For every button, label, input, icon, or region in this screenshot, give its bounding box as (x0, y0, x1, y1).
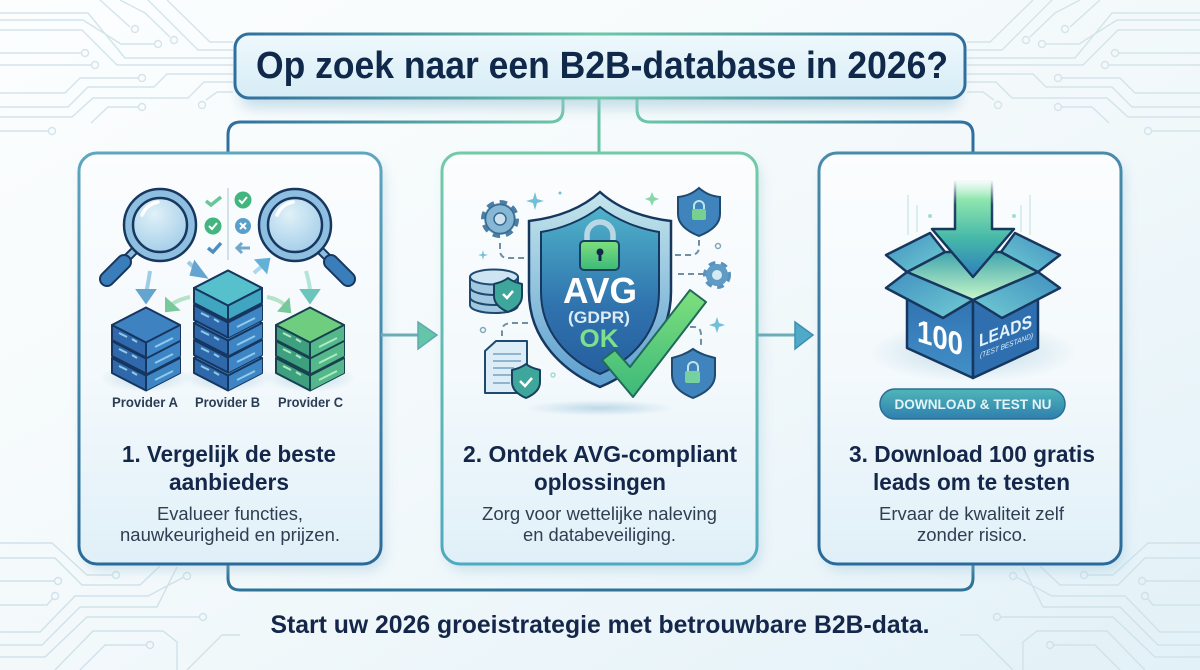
icon: main shield: AVG (563, 270, 637, 311)
stack: provider B (182, 270, 274, 392)
footer tagline: Start uw 2026 groeistrategie met betrouwbare B2B-data. (270, 611, 930, 639)
title box (235, 34, 965, 108)
dashed connector lines (500, 240, 704, 348)
connector lines between title and panels (228, 98, 973, 590)
icon: gear right (706, 264, 728, 286)
icon: main shield (529, 192, 671, 387)
text: step 2 description: en databeveiliging. (523, 525, 676, 545)
text: step 2 description (482, 504, 717, 545)
arrow: step 1 to step 2 (381, 322, 437, 349)
label on box: 100: 100 (917, 312, 963, 363)
button: download and test (880, 389, 1065, 419)
icon: big check mark (602, 290, 706, 397)
shadow under box (868, 322, 1078, 382)
provider labels: Provider B (195, 395, 260, 410)
icon: open box (886, 233, 1060, 378)
icon: left magnifying glass (107, 189, 196, 279)
icon: small shield with lock bottom right (672, 349, 715, 398)
shadow under shield (525, 400, 675, 416)
heading: step 1: 1. Vergelijk de beste (122, 441, 336, 467)
text: step 1 description: Evalueer functies, (157, 504, 303, 524)
text: step 3 description: Ervaar de kwaliteit zelf (879, 504, 1065, 524)
heading: step 2: oplossingen (534, 469, 666, 495)
stack: provider A (100, 308, 192, 392)
provider labels: Provider A (112, 395, 178, 410)
button: download and test: DOWNLOAD & TEST NU (894, 397, 1052, 412)
icon: database with shield (470, 270, 522, 313)
icon: right magnifying glass (259, 189, 348, 279)
heading: step 1: aanbieders (169, 469, 289, 495)
provider labels (112, 395, 343, 410)
icon: download arrow (932, 180, 1014, 277)
stack: provider C (264, 308, 356, 392)
icon: document with shield (485, 341, 540, 398)
icon: main shield: OK (580, 325, 618, 353)
provider labels: Provider C (278, 395, 343, 410)
panel 2: AVG compliance (442, 153, 761, 571)
text: step 3 description (879, 504, 1065, 545)
label on box: LEADS (979, 310, 1033, 360)
heading: step 2: 2. Ontdek AVG-compliant (463, 441, 737, 467)
icon: gear left (484, 203, 516, 235)
sparkles (478, 192, 725, 377)
flow arrows between providers (139, 260, 317, 311)
text: step 2 description: Zorg voor wettelijke naleving (482, 504, 717, 524)
heading: step 3: 3. Download 100 gratis (849, 441, 1095, 467)
panel 3: download leads (819, 153, 1125, 571)
label on box: LEADS: LEADS (979, 310, 1032, 351)
heading: step 3 (849, 441, 1095, 495)
comparison checkmarks (204, 188, 252, 260)
icon: main shield: (GDPR) (568, 308, 630, 327)
text: step 3 description: zonder risico. (917, 525, 1027, 545)
text: step 1 description (120, 504, 340, 545)
heading: step 2 (463, 441, 737, 495)
arrow: step 2 to step 3 (757, 322, 813, 349)
icon: small shield with lock top right (678, 188, 720, 236)
label on box: LEADS: (TEST BESTAND) (980, 331, 1033, 360)
heading: step 3: leads om te testen (873, 469, 1070, 495)
title box: Op zoek naar een B2B-database in 2026? (256, 45, 948, 87)
light beams and dots (908, 195, 1030, 235)
panel 1: compare providers (79, 153, 385, 571)
heading: step 1 (122, 441, 336, 495)
text: step 1 description: nauwkeurigheid en prijzen. (120, 525, 340, 545)
